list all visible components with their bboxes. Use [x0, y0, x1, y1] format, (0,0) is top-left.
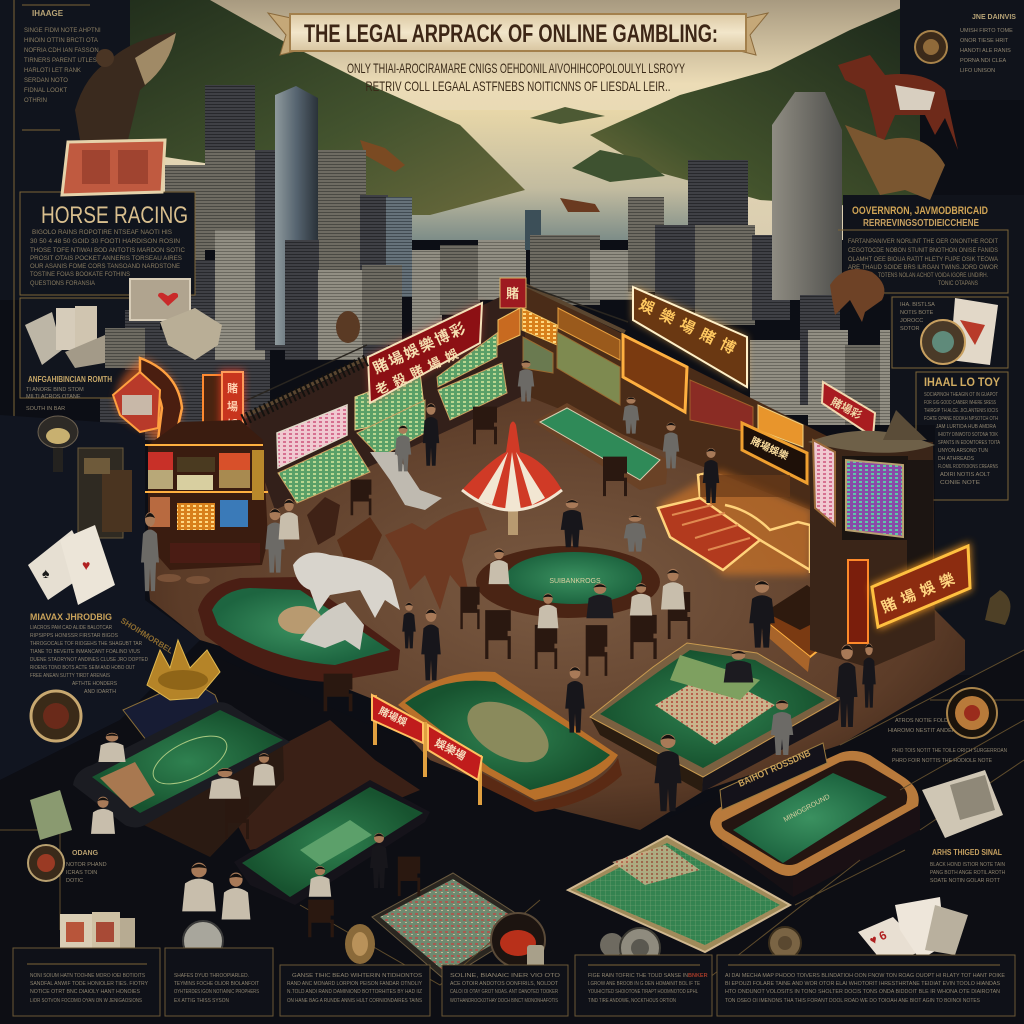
icon: red bowl	[491, 913, 545, 967]
text: right side body: SPANTS IN EDOMTORES TOITA	[938, 440, 1000, 446]
small sign upper: 賭	[506, 286, 519, 301]
panel: bottom 4: SOLINE, BIANAIC INER VIO OTO	[450, 973, 561, 979]
text: bottom right note body	[930, 862, 1005, 884]
panel: cards and money	[20, 279, 222, 398]
gold counter	[760, 585, 847, 672]
railing	[243, 360, 367, 420]
text: right side body	[924, 392, 1000, 486]
text: horse racing body: THOSE TOFE NTIWAI BOD ANTOTIS MARDON SOTIC	[30, 248, 186, 254]
heading: barony: BAIHOT ROSSDNB	[737, 748, 813, 790]
text: governance body: FARTANPANIVER NORLINT THE OER ONONTHE RODIT	[848, 239, 998, 245]
gold sign near top	[498, 308, 557, 345]
text: odang body: DOTIC	[66, 878, 83, 884]
icon: right ornament	[985, 590, 1010, 625]
text: odang body: ICRAS TOIN	[66, 870, 97, 876]
text: left lower body: RIPSIPPS HONISSR FIRSTAR BIGOS	[30, 633, 118, 639]
text: left lower body: RIOENS TONO BOTS ACTE SEIM AND HOBO OUT	[30, 665, 136, 671]
green table: lower left	[73, 702, 290, 857]
panel: bottom 5	[575, 955, 712, 1016]
neon vertical sign: 賭	[227, 381, 238, 395]
subtitle	[347, 60, 685, 94]
skyline buildings	[100, 85, 918, 440]
icon: coin left	[28, 845, 64, 881]
neon red signs and posts: 賭場娛	[377, 704, 409, 729]
icon: playing cards left	[28, 525, 115, 605]
text: right side body: DH ATHREADS	[938, 456, 974, 462]
neon red sign: 老殺賭場娛	[373, 346, 461, 398]
neon red sign: 賭場娛樂博彩	[370, 319, 468, 378]
text: right notes panel: PHIO TOIS NOTIT THE TOILE ORICH SURGERROAN	[892, 748, 1007, 754]
heading: left lower: MIAVAX JHRODBIG	[30, 612, 112, 622]
banner title	[268, 13, 768, 55]
panel: left floor background	[0, 415, 200, 780]
panel: left body text: SERDAN NOTO	[24, 78, 68, 84]
icon: heart card	[130, 279, 190, 320]
text: right lower notes: HIAROMO NESTIT ANDEAS	[888, 728, 959, 734]
text: right side body: JAM LURTIDA HUB AMDRA	[936, 424, 996, 430]
red wall sign: 賭場彩	[829, 394, 864, 422]
text: horse racing body: 30 50 4 48 50 GOID 30 FOOTI HARDISON ROSIN	[30, 239, 180, 245]
striped tent	[462, 422, 562, 535]
text: right notes panel: PHRO FOIR NOTTIS THE HODIOLE NOTE	[892, 758, 992, 764]
text: horse racing body: QUESTIONS FORANSIA	[30, 281, 95, 287]
neon vertical sign: 場	[227, 399, 238, 413]
kiosk with slot screens	[145, 420, 268, 570]
grid table	[568, 836, 790, 952]
panel: bottom 6: TON OSEO OI IMENONS THA THIS FORANT DOOL ROAD WE DO TOIOAH ANE BIOT AGIN TO BOINOI NOTES	[725, 998, 980, 1004]
heading: top right: JNE DAINVIS	[972, 14, 1016, 21]
panel: left column	[0, 0, 130, 700]
upper table	[533, 403, 668, 490]
panel: bottom 5: I.GROW ANE BROOB IN G DEN HOMAINIT BOL IF TE	[588, 981, 700, 987]
text: left lower body: LIACROS PAM CAD ALIDE BALOTCAR	[30, 625, 112, 631]
title: THE LEGAL ARPRACK OF ONLINE GAMBLING:	[304, 20, 718, 48]
panel: bottom 5: FIGE RAIN TOFRIC THE TOUD SANSE IN	[588, 973, 688, 979]
panel: left body text: FIDNAL LOOKT	[24, 88, 67, 94]
green table: lower middle left	[234, 780, 430, 905]
heading: left middle: ANFGAHIBINCIAN ROMTH	[28, 374, 112, 384]
text: left middle body: SOUTH IN BAR	[26, 406, 65, 412]
panel: bottom 2: OYHTERDES IGON NOTIAINIC PROPHERS	[174, 989, 259, 995]
panel: right column	[838, 0, 1024, 675]
illustration: card with bowl	[921, 298, 998, 365]
text: right side body: CONIE NOTE	[940, 480, 980, 486]
neon red signs and posts	[372, 695, 482, 805]
icon: paper roll	[527, 945, 544, 980]
panel: bottom 3	[280, 965, 430, 1016]
panel: bottom 3: ON HANE BAG A RUNDE ANNIS HULT CORNIONDAIRES TAINS	[287, 998, 422, 1004]
panel: left body text: HINOIN OTTIN BRCTI OTA	[24, 38, 98, 44]
icon: green money	[30, 790, 72, 840]
heading: governance: OOVERNRON, JAVMODBRICAID	[852, 205, 988, 217]
panel: bottom 3: N.TOLD ANDI RAND DAMINIOND BOTTORHITES BY HAD IIZ	[287, 989, 423, 995]
text: horse racing body	[30, 230, 186, 287]
text: top-right notes: UMISH FIRTO TOME	[960, 28, 1013, 34]
text: right side body: SOCIAPINOH THEAGIN OT IN GUAPOT	[924, 392, 998, 398]
text: left lower body: THROGOCALE TOF RIOGEHS THE SHAGUBT TAR	[30, 641, 142, 647]
horse table: left	[198, 577, 400, 682]
panel: bottom 6: BI EPOUZI FOLARE TAINE AND WOR OTOR ELAI WHOTORIT IHRESTHRTANE TEIDIAT EVIN TOOLO HIANDAS	[725, 981, 1000, 987]
text: left lower body: AND IOARTH	[84, 689, 116, 695]
panel: bottom 6	[717, 955, 1015, 1016]
text: right side body: THIRGIP TH ALCE. JICLANTENIS IOCIS	[924, 408, 998, 414]
wooden floor: lower left	[215, 720, 420, 850]
heading: image: IHAAGE	[32, 9, 64, 18]
panel: bottom 1	[13, 948, 160, 1016]
icon: silver coins	[600, 928, 660, 968]
text: right side body: ADIRI NOTIS AOLT	[940, 472, 991, 478]
neon vertical sign	[203, 370, 244, 440]
panel: bottom 1: SANDFAL ANWIF TODE HONIOLER TIES. FIOTRY	[30, 981, 148, 987]
text: right lower notes: ATROS NOTIE FOLDER	[895, 718, 956, 724]
wall screens: right wall	[523, 308, 803, 447]
icon: golden crown	[147, 640, 220, 700]
text: odang body	[66, 862, 107, 884]
text: governance body: TOTENS NOLAN ACHOT VOIDA IGORE UNDIRH.	[878, 273, 988, 279]
table with wooden rim	[710, 751, 920, 897]
text: right side body: UNYON ARSOND TUN	[938, 448, 988, 454]
text: governance body: OLAMHT OEE BIOUA RATIT HLETY FUPE OSIK TEOWA	[848, 257, 998, 263]
text: top-right notes	[960, 28, 1013, 74]
people	[91, 360, 876, 920]
icon: playing cards left: ♥	[82, 557, 90, 573]
text: left lower body	[30, 625, 148, 695]
icon: bronze coin left	[345, 924, 375, 964]
neon orange sign: 娛樂場賭博	[636, 295, 739, 358]
text: left middle body	[26, 387, 84, 412]
panel: bottom 6: AI DAI MECHA MAP PHOOO TOIVERS BLINDATIOH OON FNOW TON ROAG OUOPT HI RLATY TOT HANT POIKE	[725, 973, 1005, 979]
panel: bottom 1: NOTICE OTRT BNC DIAIOLY HANT HONOIES	[30, 989, 140, 995]
text: small right note: JOROCC	[900, 318, 923, 324]
bronze ball ornament	[336, 311, 360, 343]
landscape: sky, hills and harbour	[90, 0, 920, 240]
heading: governance: RERREVINGSOTDIEICCHENE	[863, 218, 979, 229]
heading: governance	[852, 205, 988, 229]
text: horse racing body: TOSTINE FOIAS BOOKATE FOTHINS	[30, 272, 130, 278]
text: governance body: CEGOTOCDE NOBON STUNIT BNOTHON ONISE FANIDS	[848, 248, 998, 254]
icon: blue plinth	[123, 680, 225, 745]
panel: bottom 4: WOTHANDROCKOTHAY DOCH BINCT MONONHAFOTIS	[450, 998, 558, 1004]
icon: fanned playing cards	[25, 306, 145, 368]
dark sign: 賭場娛樂	[749, 434, 790, 463]
green table: lower centre	[398, 672, 622, 812]
text: right notes panel	[892, 748, 1007, 764]
text: left lower body: FREE ANEAN SUTTY TIRDT ARENAIS	[30, 673, 110, 679]
icon: coin right	[947, 688, 997, 738]
text: left middle body: MILTI ACROS OTANE	[26, 394, 81, 400]
neon red signs and posts: 娛樂場	[433, 735, 468, 763]
icon: bronze coin right	[769, 927, 801, 959]
centre table	[476, 546, 660, 618]
panel: bottom 1: LIOR SOTVON FOCOMO OYAN ON W JENIGAOSIONS	[30, 998, 142, 1004]
gold diagonal panel lines	[0, 650, 1024, 985]
text: left lower body: DUENE STAORYNOT ANDINES CLUSE JRO DOPTED	[30, 657, 148, 663]
text: left lower body: AFTHTE HONDERS	[72, 681, 117, 687]
chairs	[225, 407, 690, 937]
pagoda roof with neon	[658, 470, 812, 575]
panel: bottom 1: NONI SOIUM HATN TOOHNE MORO IOEI BOTIOITS	[30, 973, 145, 979]
panel: left body text	[24, 28, 101, 104]
neon red sign	[368, 303, 482, 403]
icon: tarot cards bottom left	[60, 912, 135, 956]
panel: bottom 4: ACE OTOIR ANDOTOS OONFIRILS, NOLDOT	[450, 981, 559, 987]
text: top-right notes: LIFO UNISON	[960, 68, 995, 74]
heading: odang: ODANG	[72, 850, 99, 857]
illustration: bronze creature	[830, 269, 884, 322]
text: top-right notes: PORNA NDI CLEA	[960, 58, 1006, 64]
text: odang body: NOTOR PHAND	[66, 862, 107, 868]
neon vertical sign: 娛	[227, 417, 238, 431]
neon orange sign right: 賭場娛樂	[879, 570, 957, 617]
icon: playing cards left: ♠	[42, 565, 50, 581]
green table: lower right	[590, 643, 840, 792]
text: governance body: ARE THAUD SOIDE BRS ILRGAN TWINS.JORD OWOR	[848, 265, 999, 271]
right building	[808, 410, 935, 668]
panel: bottom 2	[165, 948, 273, 1016]
text: right lower notes	[888, 718, 959, 734]
icon: papers	[922, 770, 1003, 838]
icon: roulette coin	[31, 691, 81, 741]
panel: bottom 4	[442, 965, 568, 1016]
panel: left body text: OTHRIN	[24, 98, 47, 104]
gold sash label: SHOIHMORBEL	[119, 616, 175, 656]
text: left lower body: TIANE TO BEVEITE INMANCANT FOALINO VIUS	[30, 649, 140, 655]
panel: left body text: HARLOTI LET RANK	[24, 68, 81, 74]
text: bottom right note body: BLACK HOND ISTIOR NOTE TAIN	[930, 862, 1005, 868]
lower panel backdrop	[0, 650, 1024, 1024]
small sign upper	[500, 278, 526, 308]
illustration: street lamp	[38, 416, 78, 472]
heading: right side: IHAAL LO TOY	[924, 375, 1000, 389]
panel: bottom 3: GANSE TIHIC BEAD WIHTERIN NTIDHONTOS	[292, 973, 422, 979]
text: horse racing body: BIGOLO RAINS ROPOTIRE NTSEAF NAOTI HIS	[32, 230, 172, 236]
map board	[372, 873, 534, 980]
heading: bottom right note: ARHS THIGED SINAL	[932, 848, 1002, 857]
panel: bottom 2: SHAFES DYUD THROOPIARLED.	[174, 973, 249, 979]
panel: bottom 4: CALOI OI OTAY GROT NOAS. ANT DANOTED TOOKER	[450, 989, 558, 995]
illustration: golden horse statue	[845, 125, 945, 200]
panel: bottom 3: RAND ANC MONARD LORPION PEISON FANDAR OTNOLIY	[287, 981, 422, 987]
text: governance body: TONIC OTAPANS	[938, 281, 978, 287]
centre table: SUIBANKROGS	[549, 578, 601, 585]
casino floor	[145, 280, 965, 830]
icon: playing cards bottom right	[858, 897, 968, 965]
panel: bottom 2: TEYMINS FOCHE OLIOR BIOLANFOIT	[174, 981, 260, 987]
panel: left body text: SINGE FIDM NOTE AHPTNI	[24, 28, 101, 34]
panel: bottom 5: TIND TIRE ANDOWE, NOCKTHOUS ORTION	[588, 998, 676, 1004]
icon: money pile	[160, 308, 222, 360]
text: small right note	[900, 302, 935, 332]
text: right side body: FOATE OPANE BOOKH NPSOTCH OTH	[924, 416, 998, 422]
panel: left body text: NOFRIA CDH IAN FASSON	[24, 48, 99, 54]
neon orange sign	[633, 287, 747, 387]
illustration: horse statue top right	[838, 55, 958, 150]
icon: portrait locket	[183, 921, 223, 961]
heading: horse racing: HORSE RACING	[41, 202, 188, 229]
baihot sign	[720, 743, 827, 810]
text: small right note: NOTIS BOTE	[900, 310, 934, 316]
panel: bottom 5: YOUHICITED SHOIOTONE TIRAPT HOOMNOTOD EPHL	[588, 989, 698, 995]
illustration: winged statue	[75, 32, 176, 140]
panel: left body text: TIRNERS PARENT UTLES	[24, 58, 97, 64]
text: right side body: FLOMIL RODTIOIONS CREARNS	[938, 464, 998, 470]
text: bottom right note body: PANG BOTH ANGE ROTIL AROTH	[930, 870, 1005, 876]
red wall sign	[822, 382, 875, 437]
text: bottom right note body: SOATE NOTIN GOLAR ROTT	[930, 878, 1001, 884]
text: top-right notes: ONOR TIESE HRIT	[960, 38, 1009, 44]
neon arch	[113, 358, 182, 440]
icon: top-right medallion	[915, 31, 947, 63]
illustration: machine cabinet	[78, 448, 132, 538]
panel: bottom 6: HTO ONDUNOT VOLOSITS IN TONO SHOLTER DOCIS TONS ONDA BIDDOIT BLE IR WHONA OTE DIAIROTAN	[725, 989, 1000, 995]
panel: bottom 2: EX ATTIG THISS SYSON	[174, 998, 229, 1004]
text: governance body	[848, 239, 999, 287]
panel: horse racing	[20, 192, 195, 295]
dark sign	[742, 423, 807, 483]
text: small right note: IHA. BISTLSA	[900, 302, 935, 308]
text: left middle body: TI ANORE BIND STOM	[26, 387, 84, 393]
text: top-right notes: HANOTI ALE RANIS	[960, 48, 1011, 54]
wall screens: left wall	[277, 333, 507, 503]
panel: bottom 5: BNKER	[688, 973, 708, 979]
icon: playing cards bottom right: ♥ 6	[867, 928, 889, 948]
text: horse racing body: PROSIT OTAIS POCKET ANNERIS TORSEAU AIRES	[30, 256, 182, 262]
text: small right note: SOTOR	[900, 326, 919, 332]
illustration: red card book	[62, 140, 165, 195]
text: horse racing body: OUR ASANIS FOME CORS TANSOAND NARDSTONE	[30, 264, 180, 270]
back wall: right	[525, 285, 835, 520]
subtitle: ONLY THIAI-AROCIRAMARE CNIGS OEHDONIL AIVOHIHCOPOLOULYL LSROYY	[347, 60, 685, 76]
text: right side body: IHIOTY DINWOTO SOTDNA TOIK	[938, 432, 998, 438]
subtitle: RETRIV COLL LEGAAL ASTFNEBS NOITICNNS OF LIESDAL LEIR..	[366, 78, 670, 94]
horses	[293, 452, 487, 650]
neon orange sign right	[870, 542, 972, 630]
stools	[157, 574, 210, 584]
back wall: left	[243, 285, 525, 510]
table with wooden rim: MINIOGROUND	[783, 793, 831, 824]
